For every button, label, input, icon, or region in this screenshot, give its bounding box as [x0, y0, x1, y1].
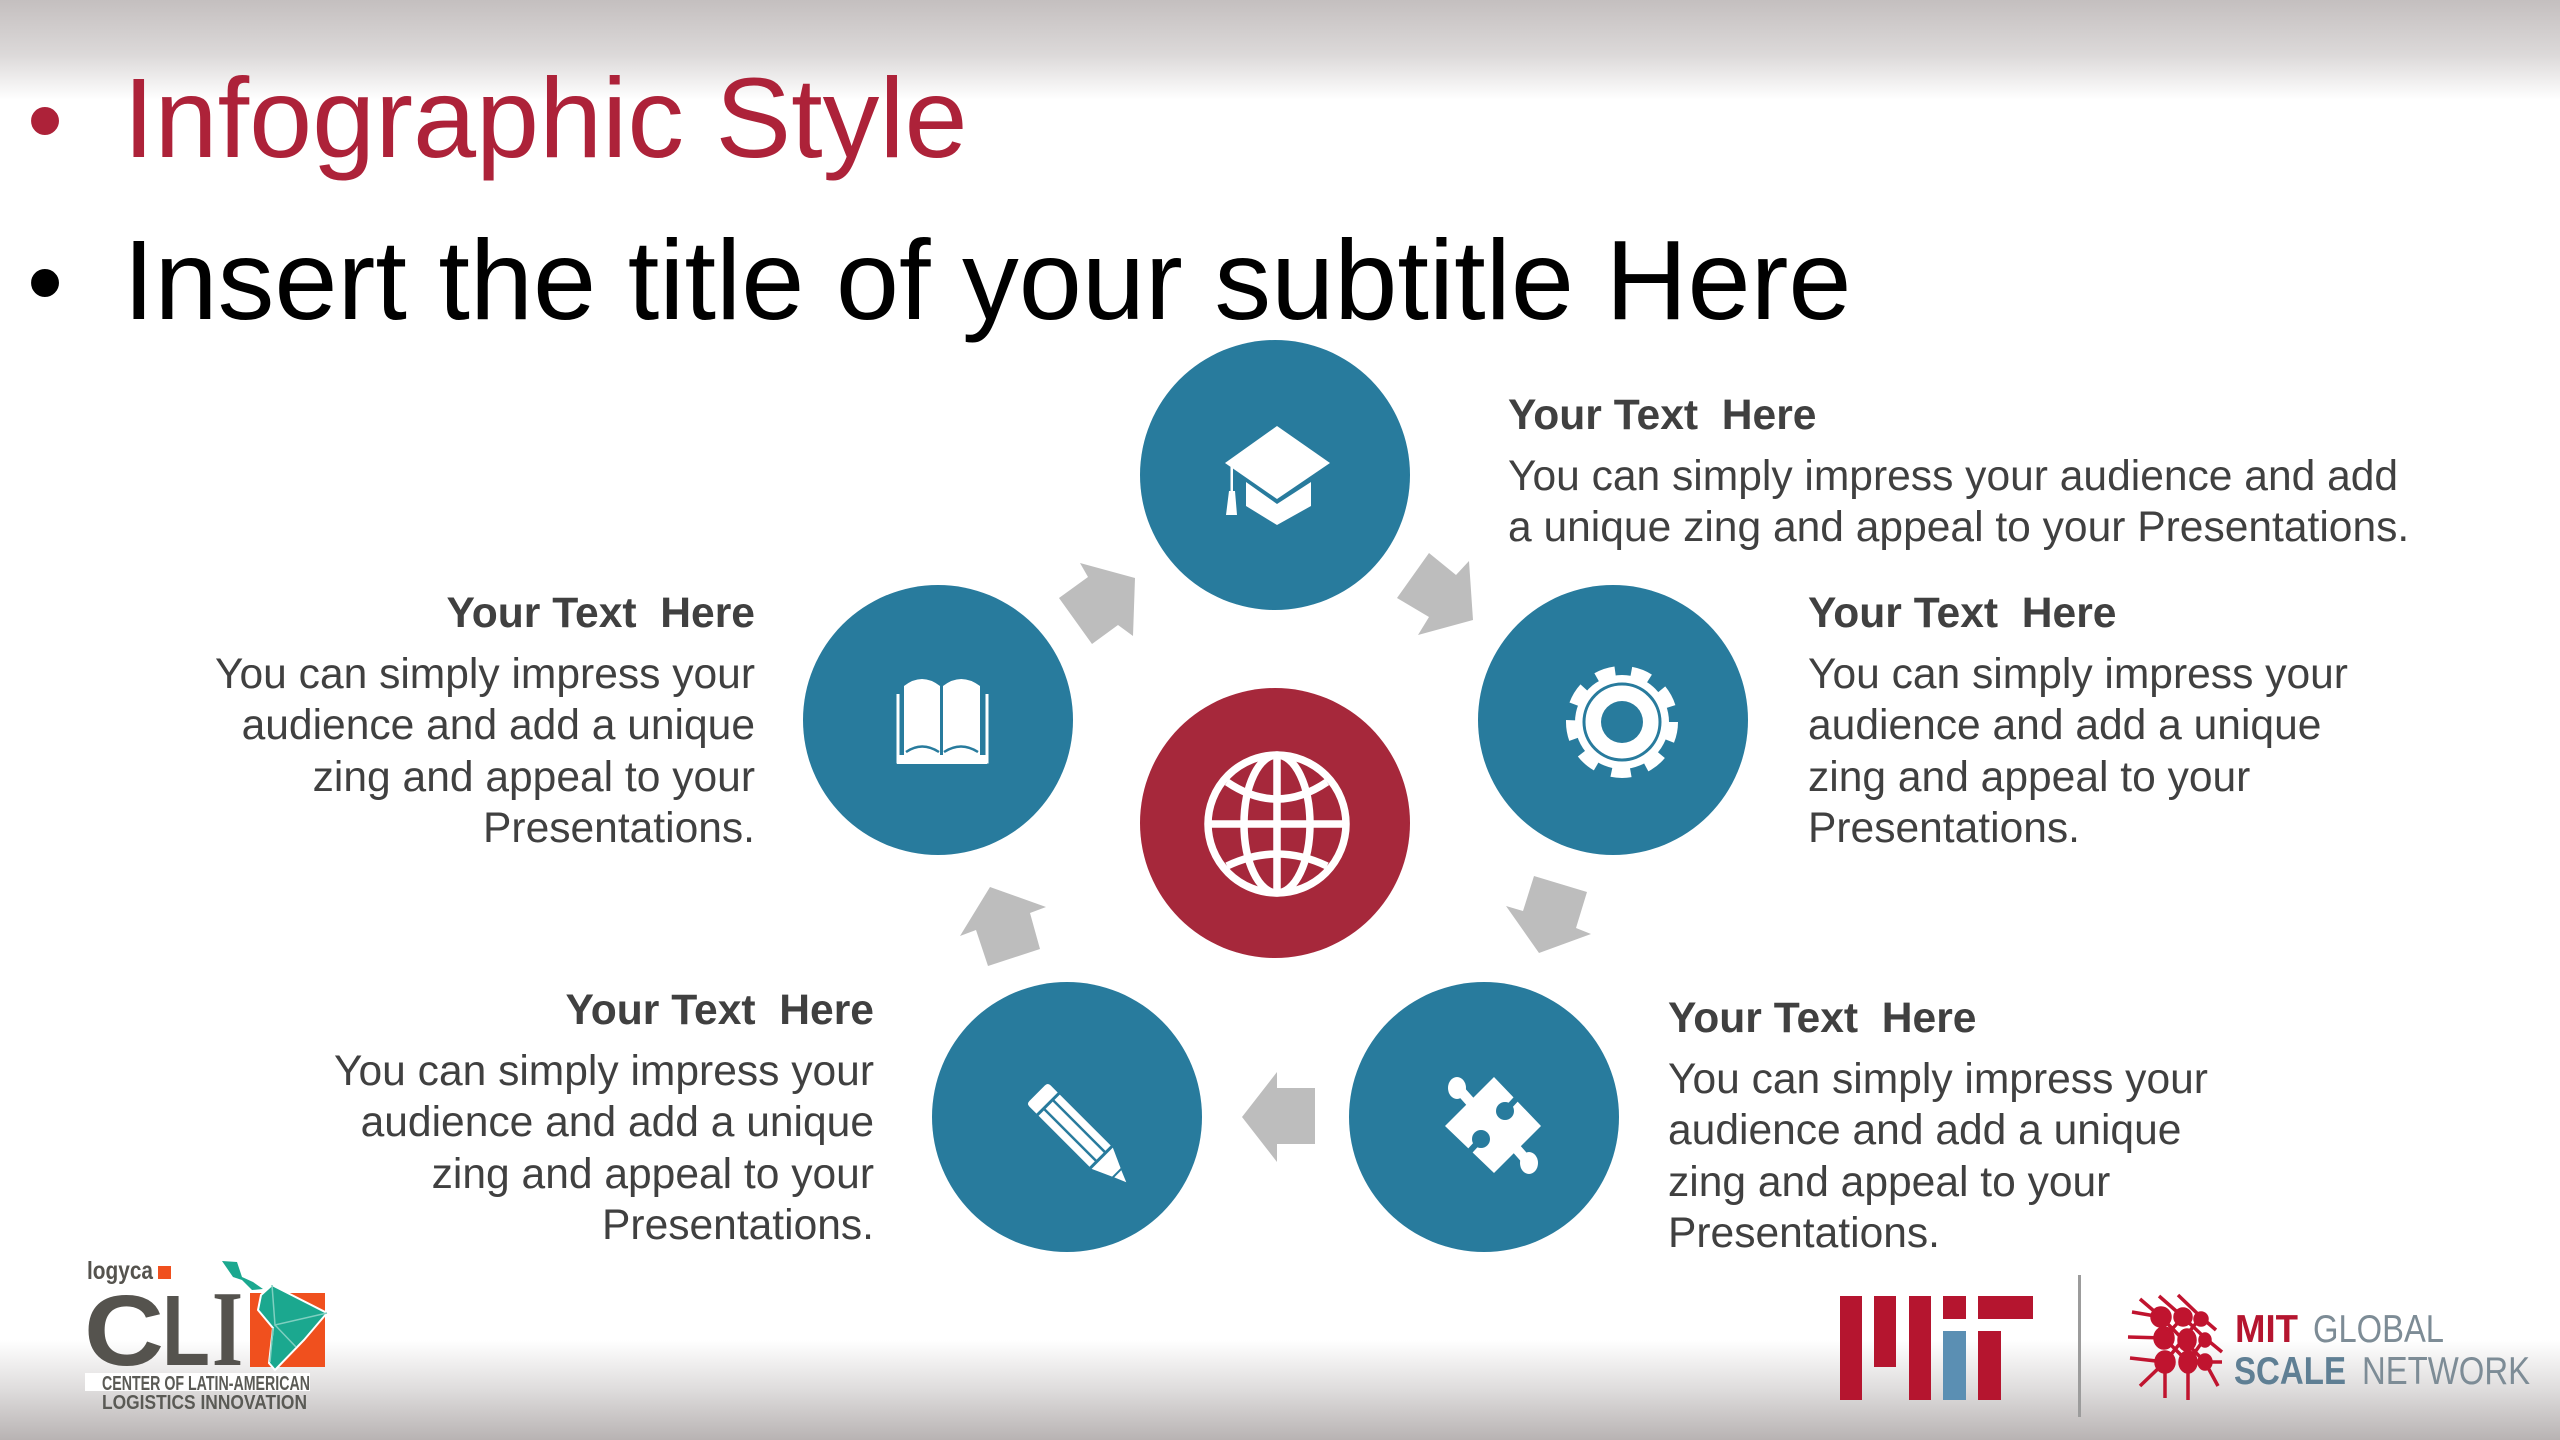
node: globe — [1140, 688, 1410, 958]
text block: right: zing and appeal to your — [1808, 753, 2250, 801]
text block: left: zing and appeal to your — [313, 753, 755, 801]
text block: bottom right: audience and add a unique — [1668, 1106, 2181, 1154]
logo: CLI: I — [212, 1270, 243, 1389]
text block: top right: a unique zing and appeal to your Presentations. — [1508, 503, 2409, 551]
logo: CLI: CENTER OF LATIN-AMERICAN — [102, 1373, 310, 1395]
logo: CLI: L — [162, 1275, 210, 1387]
icon: book — [897, 679, 987, 764]
icon: graduation cap — [1225, 426, 1330, 525]
text block: bottom right: You can simply impress your — [1668, 1055, 2208, 1103]
title: • — [27, 62, 63, 177]
logo: CLI: LOGISTICS INNOVATION — [102, 1392, 307, 1414]
icon: globe — [1208, 755, 1346, 893]
text block: right: You can simply impress your — [1808, 650, 2348, 698]
title: Infographic Style — [123, 55, 968, 182]
text block: left: Presentations. — [483, 804, 755, 852]
arrow: right to bottom right — [1506, 876, 1591, 953]
icon: network — [2128, 1295, 2222, 1400]
text block: top right: You can simply impress your audience and add — [1508, 452, 2398, 500]
arrow: left to top — [1059, 563, 1135, 644]
arrow: bottom right to bottom left — [1242, 1072, 1315, 1162]
logo: CLI: C — [84, 1275, 164, 1387]
subtitle: Insert the title of your subtitle Here — [123, 217, 1852, 344]
arrow: bottom left to left — [960, 887, 1046, 966]
text block: right: audience and add a unique — [1808, 701, 2321, 749]
node: puzzle — [1349, 982, 1619, 1252]
icon: pencil — [1027, 1083, 1137, 1193]
text block: top right: Your Text Here — [1508, 391, 1816, 439]
logo: MIT Global Scale Network: MIT — [2235, 1308, 2298, 1351]
text block: bottom right: Your Text Here — [1668, 994, 1976, 1042]
text block: left: audience and add a unique — [242, 701, 755, 749]
text block: right: Your Text Here — [1808, 589, 2116, 637]
arrow: top to right — [1397, 553, 1473, 635]
text block: bottom left: Presentations. — [602, 1201, 874, 1249]
logo: MIT Global Scale Network — [2128, 1295, 2530, 1400]
text block: left: You can simply impress your — [215, 650, 755, 698]
text block: bottom right: zing and appeal to your — [1668, 1158, 2110, 1206]
text block: right — [1808, 589, 2348, 852]
text block: top right — [1508, 391, 2409, 551]
logo: MIT Global Scale Network: SCALE — [2234, 1350, 2346, 1393]
logo: MIT — [1840, 1296, 2033, 1400]
text block: bottom right — [1668, 994, 2208, 1257]
text block: left: Your Text Here — [446, 589, 755, 637]
text block: right: Presentations. — [1808, 804, 2080, 852]
text block: bottom left — [334, 986, 874, 1249]
node: graduation cap — [1140, 340, 1410, 610]
text block: bottom right: Presentations. — [1668, 1209, 1940, 1257]
text block: bottom left: audience and add a unique — [361, 1098, 874, 1146]
text block: left — [215, 589, 755, 852]
logo: MIT Global Scale Network: GLOBAL — [2313, 1308, 2444, 1351]
logo divider — [2078, 1275, 2081, 1417]
node: book — [803, 585, 1073, 855]
logo: MIT Global Scale Network: NETWORK — [2362, 1350, 2530, 1393]
logo: CLI — [84, 1257, 327, 1414]
text block: bottom left: You can simply impress your — [334, 1047, 874, 1095]
icon: puzzle piece — [1445, 1077, 1541, 1174]
icon: gear — [1572, 672, 1672, 772]
text block: bottom left: Your Text Here — [566, 986, 874, 1034]
logo: CLI: logyca — [87, 1257, 154, 1285]
text block: bottom left: zing and appeal to your — [432, 1150, 874, 1198]
subtitle: • — [27, 224, 63, 339]
node: gear — [1478, 585, 1748, 855]
node: pencil — [932, 982, 1202, 1252]
